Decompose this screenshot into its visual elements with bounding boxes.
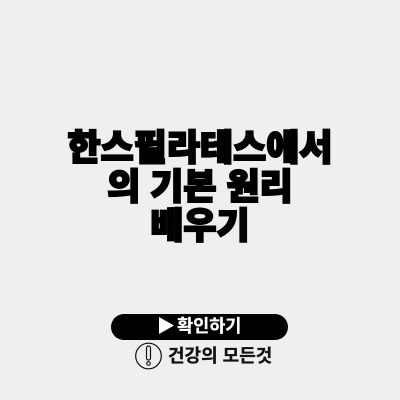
title line 1: 한스필라테스에서 [68,127,332,168]
icon: play triangle [159,317,174,334]
title line 2: 의 기본 원리 [107,166,293,207]
brand label: 건강의 모든것 [168,346,272,366]
title line 3: 배우기 [150,205,250,246]
icon: exclamation circle [135,342,162,370]
title [68,127,332,246]
button: confirm [111,314,288,340]
button label: 확인하기 [177,316,241,336]
